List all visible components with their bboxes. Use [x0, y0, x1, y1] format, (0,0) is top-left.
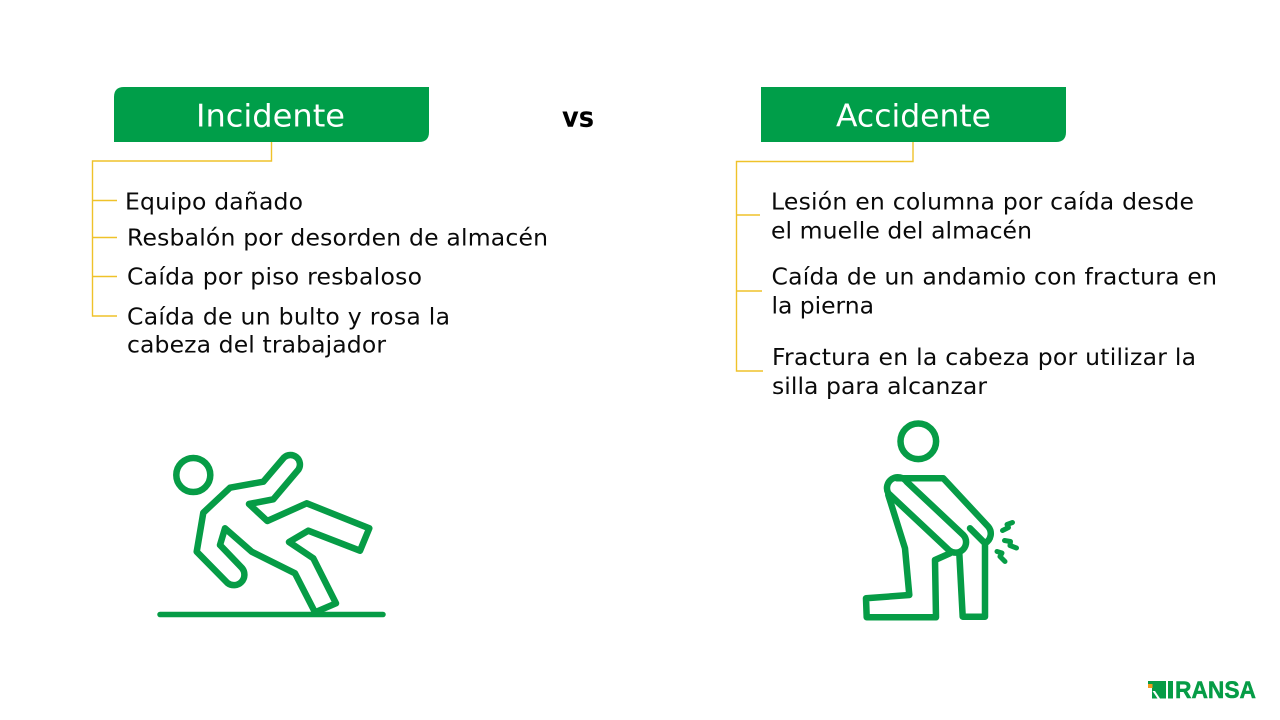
heading: accidente: [761, 87, 1066, 142]
logo: ransa: RANSA: [1175, 677, 1256, 704]
icon: person slipping: [160, 455, 383, 614]
panel: incidente: [92, 87, 548, 614]
icon: person with knee pain: [866, 424, 1016, 617]
text block: accidente examples: el muelle del almacén: [771, 216, 1032, 244]
text block: incidente examples: Caída de un bulto y rosa la: [127, 302, 450, 330]
heading: incidente: [114, 87, 429, 142]
heading: accidente: Accidente: [836, 98, 991, 134]
connector: accidente list: [736, 142, 913, 371]
label: vs: vs: [562, 100, 594, 133]
text block: accidente examples: Lesión en columna por caída desde: [771, 187, 1194, 215]
text block: incidente examples: Equipo dañado: [125, 187, 303, 215]
text block: accidente examples: silla para alcanzar: [772, 372, 987, 400]
text block: accidente examples: la pierna: [772, 292, 874, 320]
heading: incidente: Incidente: [196, 98, 345, 134]
text block: incidente examples: cabeza del trabajador: [127, 330, 386, 358]
connector: incidente list: [92, 142, 272, 316]
text block: incidente examples: Caída por piso resbaloso: [127, 262, 422, 290]
text block: accidente examples: Caída de un andamio con fractura en: [772, 262, 1217, 290]
text block: incidente examples: Resbalón por desorden de almacén: [127, 223, 548, 251]
panel: accidente: [736, 87, 1217, 617]
text block: accidente examples: Fractura en la cabeza por utilizar la: [772, 343, 1196, 371]
text block: incidente examples: [125, 187, 548, 358]
text block: accidente examples: [771, 187, 1217, 400]
